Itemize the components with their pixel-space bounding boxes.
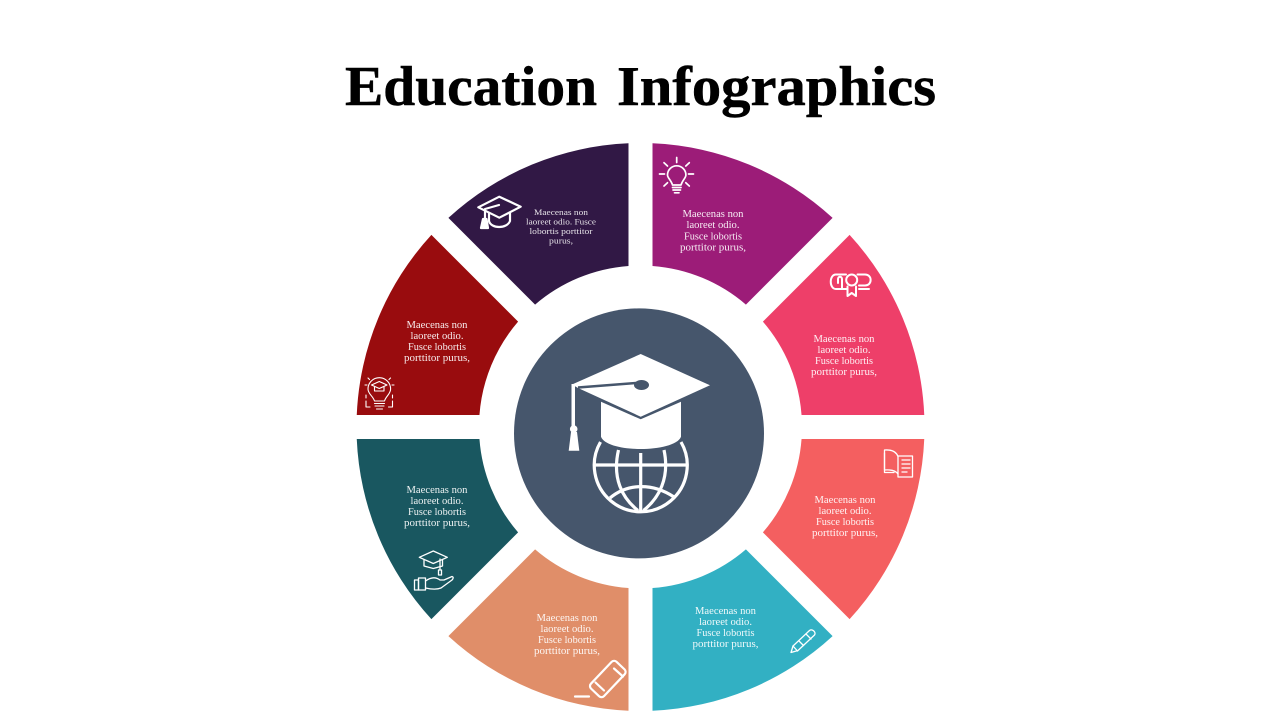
icon: hand holding graduation cap — [414, 551, 453, 590]
icon: eraser — [575, 659, 627, 699]
text: magenta segment: Fusce lobortis — [684, 232, 742, 242]
icon: light bulb with cap — [365, 378, 394, 409]
panel: dark teal segment — [357, 439, 518, 619]
text: coral segment: Fusce lobortis — [816, 517, 874, 528]
panel: teal segment — [652, 549, 833, 711]
panel: center circle — [514, 308, 764, 558]
text: coral segment — [812, 495, 878, 539]
icon: diploma — [831, 274, 871, 296]
panel: coral segment — [763, 439, 924, 619]
panel: orange segment — [448, 549, 628, 711]
text: purple segment — [526, 207, 596, 246]
text: teal segment: Maecenas non — [695, 606, 756, 617]
text: coral segment: Maecenas non — [814, 495, 876, 506]
text: magenta segment: Maecenas non — [682, 209, 744, 220]
panel: purple segment — [448, 143, 628, 305]
text: teal segment: laoreet odio. — [699, 617, 752, 628]
text: orange segment — [534, 613, 600, 657]
text: orange segment: Maecenas non — [536, 613, 598, 624]
text: coral segment: porttitor purus, — [812, 528, 878, 539]
panel: red segment — [357, 235, 518, 415]
text: purple segment: purus, — [549, 236, 573, 246]
text: pink segment — [811, 334, 877, 378]
text: red segment: laoreet odio. — [410, 331, 464, 342]
text: teal segment — [692, 606, 758, 650]
text: magenta segment — [680, 209, 746, 254]
text: purple segment: Maecenas non — [534, 207, 589, 217]
text: pink segment: Fusce lobortis — [815, 356, 873, 367]
text: dark teal segment: porttitor purus, — [404, 518, 470, 529]
text: red segment: Fusce lobortis — [408, 342, 466, 353]
text: orange segment: porttitor purus, — [534, 646, 600, 657]
icon: pen — [791, 630, 815, 652]
text: dark teal segment: Maecenas non — [406, 485, 468, 496]
text: red segment: porttitor purus, — [404, 353, 470, 364]
text: pink segment: laoreet odio. — [818, 345, 870, 356]
text: purple segment: laoreet odio. Fusce — [526, 216, 596, 226]
icon: light bulb — [660, 158, 694, 193]
icon: open book — [884, 450, 912, 477]
text: red segment — [404, 320, 470, 364]
text: dark teal segment: laoreet odio. — [410, 496, 464, 507]
text: red segment: Maecenas non — [406, 320, 468, 331]
text: coral segment: laoreet odio. — [818, 506, 872, 517]
panel: magenta segment — [652, 143, 833, 305]
text: pink segment: Maecenas non — [814, 334, 874, 345]
text: magenta segment: porttitor purus, — [680, 242, 746, 254]
text: dark teal segment — [404, 485, 470, 529]
text: dark teal segment: Fusce lobortis — [408, 507, 466, 518]
text: purple segment: lobortis porttitor — [530, 226, 593, 236]
title — [345, 56, 936, 118]
title: Education — [345, 56, 597, 118]
icon: graduation cap outline — [478, 197, 521, 228]
text: pink segment: porttitor purus, — [811, 367, 877, 378]
text: orange segment: laoreet odio. — [540, 624, 594, 635]
title: Infographics — [617, 56, 936, 118]
text: teal segment: Fusce lobortis — [696, 628, 755, 639]
panel: pink segment — [763, 235, 924, 415]
icon: graduation cap on globe — [569, 354, 710, 512]
text: teal segment: porttitor purus, — [692, 639, 758, 650]
text: orange segment: Fusce lobortis — [538, 635, 596, 646]
text: magenta segment: laoreet odio. — [686, 220, 740, 231]
